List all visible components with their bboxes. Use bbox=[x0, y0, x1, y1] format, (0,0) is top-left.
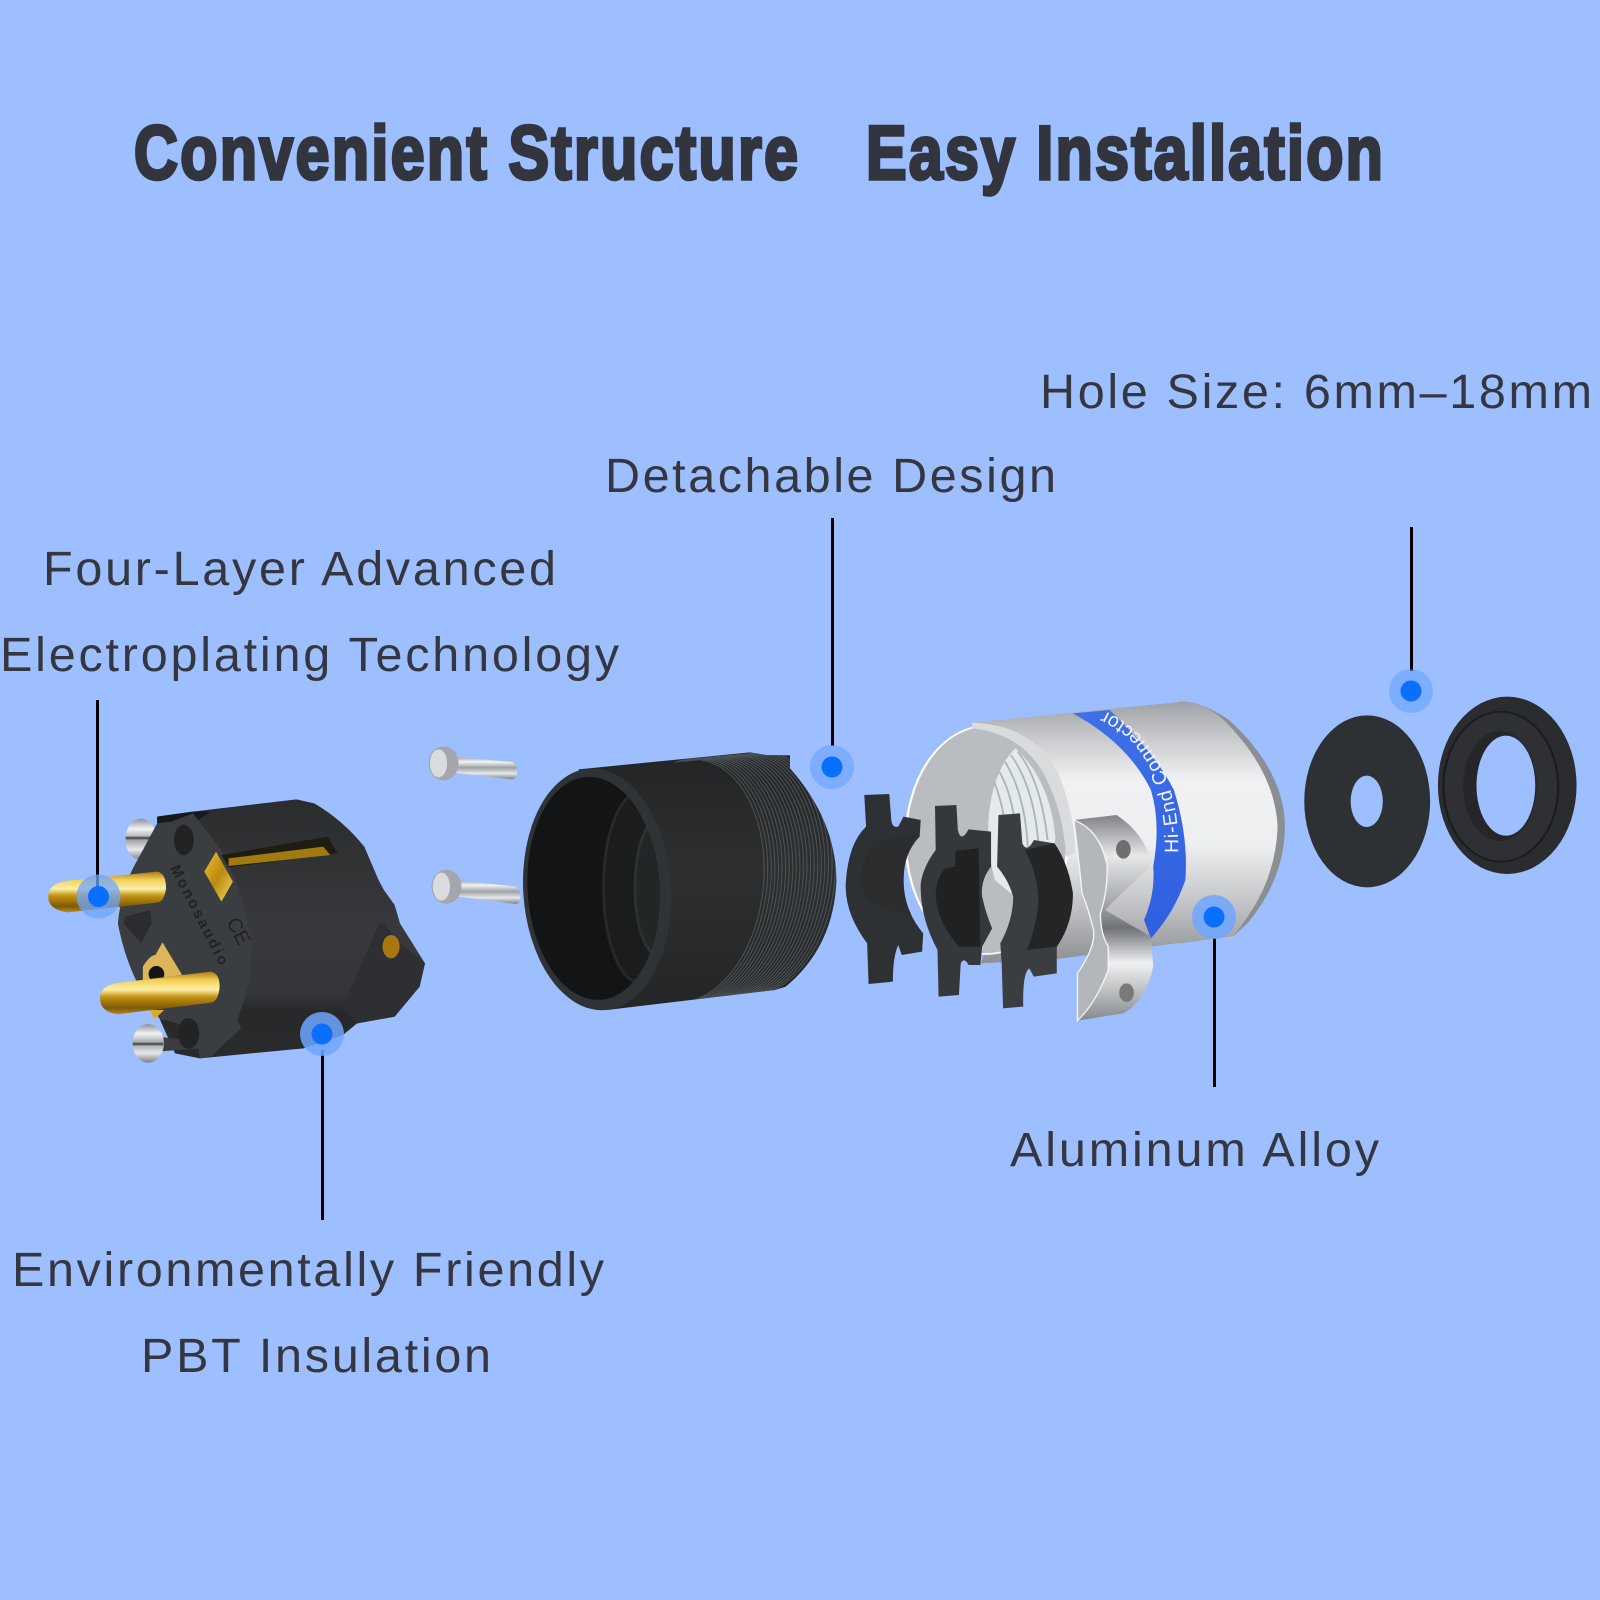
bracket screw hole bottom bbox=[1119, 983, 1134, 1002]
embossed CE mark: CE bbox=[222, 914, 254, 949]
label: aluminum alloy: Aluminum Alloy bbox=[1010, 1123, 1380, 1177]
retaining clip left bbox=[846, 794, 923, 984]
aluminum shell bbox=[906, 702, 1285, 964]
callout: four-layer pin bbox=[76, 700, 120, 918]
retaining clip right bbox=[997, 813, 1073, 1008]
sleeve body bbox=[579, 752, 836, 1010]
sleeve rim bbox=[517, 765, 678, 1014]
collar screw hole bbox=[382, 935, 400, 958]
bracket screw hole top bbox=[1116, 840, 1131, 859]
label: hole size: Hole Size: 6mm–18mm bbox=[1040, 365, 1592, 419]
slot gold contact bbox=[229, 847, 330, 866]
title bbox=[134, 111, 1383, 196]
band text: Hi-End Connector bbox=[1100, 712, 1178, 852]
label: four-layer electroplating: Electroplating Technology bbox=[0, 628, 620, 682]
top screw bbox=[125, 819, 193, 860]
blue band bbox=[1073, 710, 1186, 938]
gold triangle contact bbox=[143, 942, 182, 980]
bracket metal bbox=[1074, 815, 1153, 1021]
shell outer surface bbox=[972, 702, 1278, 963]
callout: aluminum shell bbox=[1192, 895, 1236, 1087]
label: four-layer electroplating bbox=[0, 542, 620, 682]
callout: hole size washer bbox=[1389, 527, 1433, 713]
embossed rating mark bbox=[123, 910, 152, 943]
live slot bbox=[221, 837, 337, 867]
sleeve interior bbox=[521, 774, 666, 1003]
title: Easy Installation bbox=[866, 111, 1383, 196]
screw upper bbox=[429, 746, 517, 780]
sleeve threads bbox=[675, 752, 836, 999]
label: detachable design: Detachable Design bbox=[605, 449, 1056, 503]
screw recess top bbox=[174, 825, 194, 855]
threaded black sleeve bbox=[517, 752, 836, 1014]
screw recess bottom bbox=[178, 1018, 199, 1049]
retaining clip middle bbox=[921, 805, 992, 997]
plug body bbox=[157, 799, 425, 1058]
gold pin upper bbox=[48, 872, 166, 912]
bracket front face bbox=[1074, 820, 1108, 1021]
inner threads bbox=[988, 748, 1055, 893]
label: PBT insulation bbox=[12, 1243, 605, 1383]
bottom screw bbox=[132, 1024, 200, 1063]
gold diamond contact bbox=[204, 852, 233, 902]
shell end cap bbox=[1178, 702, 1285, 943]
embossed brand text: Monosaudio bbox=[166, 862, 232, 968]
plug front face bbox=[118, 813, 252, 1058]
top notch bbox=[157, 812, 211, 827]
shell front chamfer bbox=[972, 723, 1075, 857]
shell inner wall bbox=[906, 726, 1067, 954]
gold triangle lower bbox=[150, 1010, 164, 1019]
label: four-layer electroplating: Four-Layer Advanced bbox=[43, 542, 556, 596]
rear collar bbox=[343, 923, 425, 1023]
inner rings bbox=[602, 796, 660, 982]
title: Convenient Structure bbox=[134, 111, 798, 196]
gold pin lower bbox=[100, 972, 220, 1014]
plug head bbox=[48, 799, 425, 1063]
screw lower bbox=[431, 870, 520, 904]
contact hole bbox=[149, 966, 164, 982]
callout: PBT body bbox=[300, 1012, 344, 1220]
label: PBT insulation: Environmentally Friendly bbox=[12, 1243, 605, 1297]
rubber washer bbox=[1304, 715, 1430, 887]
label: PBT insulation: PBT Insulation bbox=[141, 1329, 491, 1383]
threaded retaining ring bbox=[1438, 697, 1577, 874]
callout: detachable sleeve bbox=[810, 518, 854, 789]
clamp bracket bbox=[1074, 815, 1153, 1021]
